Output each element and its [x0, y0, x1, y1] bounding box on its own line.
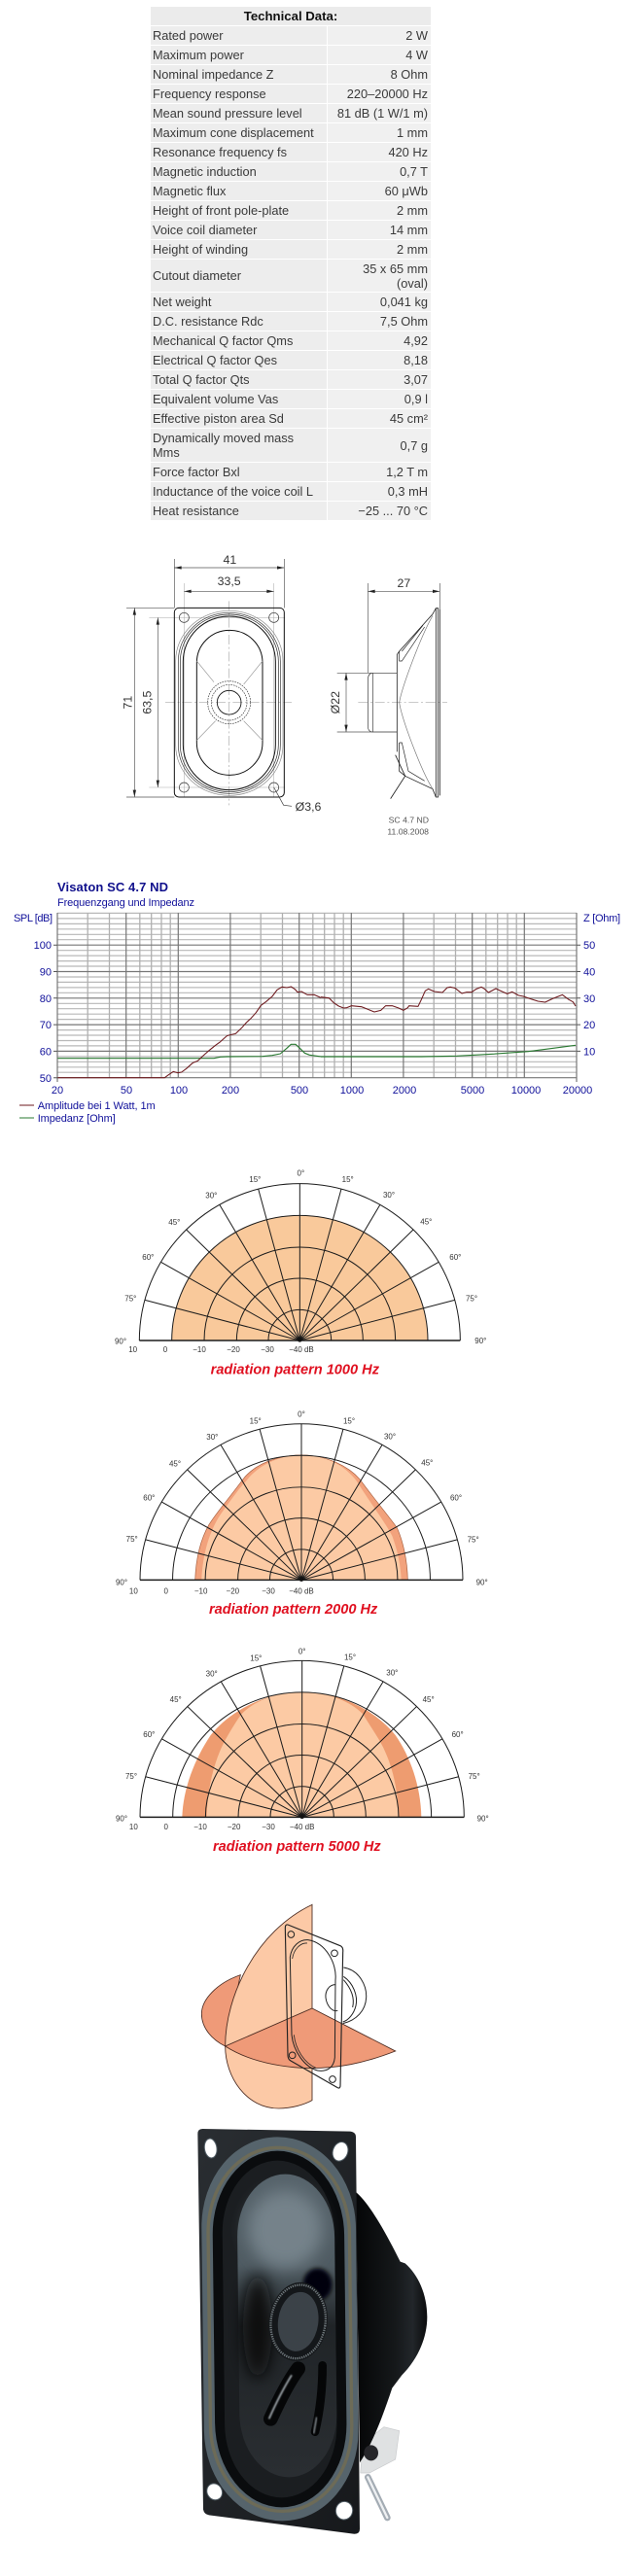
row: dynamically moved mass: 0,7 g — [401, 437, 428, 453]
decibel scale labels — [129, 1823, 314, 1831]
row: DC resistance: D.C. resistance Rdc — [153, 314, 263, 329]
row: mean sound pressure level — [151, 104, 431, 123]
angle labels: 90° — [116, 1815, 127, 1824]
row: nominal impedance: Nominal impedance Z — [153, 67, 273, 82]
row: magnetic flux — [151, 182, 431, 201]
row: dynamically moved mass — [151, 429, 431, 463]
decibel scale labels: −20 — [228, 1823, 241, 1831]
angle labels: 0° — [298, 1168, 304, 1177]
row: voice coil inductance: Inductance of the voice coil L — [153, 484, 313, 499]
row: force factor: Force factor Bxl — [153, 465, 240, 479]
row: mean sound pressure level: Mean sound pressure level — [153, 106, 302, 121]
decibel scale labels: 0 — [163, 1586, 168, 1595]
x axis: frequency: 1000 — [340, 1085, 364, 1097]
row: effective piston area: Effective piston area Sd — [153, 411, 284, 426]
radiation area outer 2000 Hz — [195, 1455, 407, 1580]
angle labels: 60° — [450, 1494, 462, 1503]
technical drawing: speaker dimensions — [121, 553, 447, 837]
dimension labels: side view: Ø22 — [329, 691, 342, 714]
row: voice coil diameter: Voice coil diameter — [153, 223, 257, 237]
photo: speaker product illustration — [197, 2129, 427, 2534]
right axis: impedance: 20 — [583, 1020, 595, 1031]
angle labels: 75° — [125, 1772, 137, 1781]
row: DC resistance: 7,5 Ohm — [380, 314, 428, 329]
row: cutout diameter: (oval) — [397, 276, 428, 290]
decibel scale labels: −10 — [193, 1823, 207, 1831]
lead wire highlight left — [269, 2375, 292, 2419]
right axis: impedance: 10 — [583, 1046, 595, 1058]
row: nominal impedance: 8 Ohm — [391, 67, 428, 82]
angle labels: 60° — [449, 1253, 461, 1262]
x axis: frequency: 50 — [121, 1085, 132, 1097]
angle labels: 15° — [250, 1416, 262, 1425]
decibel scale labels: −10 — [194, 1586, 208, 1595]
row: total Q factor — [151, 370, 431, 390]
angle labels: 75° — [469, 1772, 480, 1781]
row: voice coil diameter: 14 mm — [390, 223, 428, 237]
angle labels: 15° — [249, 1175, 261, 1184]
panel: technical data table — [151, 7, 431, 520]
row: rated power — [151, 26, 431, 46]
decibel scale labels: −40 dB — [289, 1345, 314, 1354]
polar grid — [140, 1660, 464, 1819]
dimension lines: front view — [126, 559, 292, 806]
angle labels: 15° — [250, 1654, 262, 1662]
row: voice coil inductance — [151, 482, 431, 502]
dust cap — [263, 2279, 333, 2365]
x axis: frequency: 10000 — [511, 1085, 541, 1097]
row: electrical Q factor: 8,18 — [404, 353, 428, 367]
row: force factor — [151, 463, 431, 482]
chart title: Visaton SC 4.7 ND — [57, 880, 168, 894]
polar grid — [140, 1424, 463, 1582]
row: mechanical Q factor: 4,92 — [404, 333, 428, 348]
angle labels: 75° — [468, 1536, 479, 1545]
polar plot: radiation pattern 5000 Hz — [116, 1648, 489, 1855]
angle labels: 15° — [343, 1416, 355, 1425]
chart grid — [53, 913, 580, 1082]
row: maximum power — [151, 46, 431, 65]
angle labels: 0° — [298, 1410, 305, 1419]
decibel scale labels: −30 — [262, 1586, 275, 1595]
row: frequency response — [151, 85, 431, 104]
row: resonance frequency — [151, 143, 431, 162]
angle labels: 45° — [170, 1695, 182, 1704]
row: electrical Q factor: Electrical Q factor Qes — [153, 353, 277, 367]
angle labels: 30° — [383, 1191, 395, 1200]
row: height of front pole-plate — [151, 201, 431, 221]
dimension labels: side view — [329, 576, 429, 837]
left axis: SPL: 80 — [40, 993, 52, 1005]
surround lighter band — [222, 2161, 337, 2497]
row: total Q factor: Total Q factor Qts — [153, 372, 250, 387]
decibel scale labels: −30 — [261, 1345, 274, 1354]
legend: Amplitude bei 1 Watt, 1m — [38, 1100, 156, 1112]
row: equivalent volume: 0,9 l — [404, 392, 428, 406]
x axis: frequency: 5000 — [461, 1085, 484, 1097]
row: height of winding: 2 mm — [397, 242, 428, 257]
x axis: frequency: 2000 — [393, 1085, 416, 1097]
horizontal plane front — [226, 2008, 396, 2069]
row: heat resistance — [151, 502, 431, 521]
row: voice coil inductance: 0,3 mH — [388, 484, 428, 499]
row: magnetic induction: 0,7 T — [400, 164, 428, 179]
solder lug — [368, 2477, 387, 2518]
row: maximum cone displacement: 1 mm — [397, 125, 428, 140]
lead wire highlight right — [314, 2418, 317, 2433]
angle labels: 90° — [477, 1815, 489, 1824]
caption: radiation pattern 2000 Hz — [209, 1602, 378, 1618]
angle labels: 60° — [452, 1730, 464, 1739]
gasket ring — [200, 2137, 360, 2521]
front flange — [197, 2129, 360, 2534]
legend — [19, 1100, 156, 1125]
x axis: frequency: 100 — [170, 1085, 188, 1097]
cone highlight — [248, 2190, 323, 2268]
decibel scale labels: −20 — [227, 1586, 240, 1595]
radiation area inner 2000 Hz — [201, 1455, 402, 1580]
front view of speaker — [149, 583, 292, 805]
polar grid — [139, 1184, 460, 1342]
left axis: SPL: SPL [dB] — [14, 913, 53, 924]
angle labels: 75° — [466, 1294, 477, 1303]
row: equivalent volume — [151, 390, 431, 409]
lead wire glue right — [315, 2365, 323, 2432]
radiation area inner 5000 Hz — [207, 1692, 399, 1817]
row: maximum cone displacement — [151, 123, 431, 143]
angle labels: 90° — [115, 1338, 126, 1346]
caption: radiation pattern 5000 Hz — [213, 1839, 381, 1855]
right axis: impedance: 50 — [583, 940, 595, 952]
dimension labels: front view: 63,5 — [140, 691, 154, 714]
dimension labels: side view: SC 4.7 ND — [389, 816, 429, 825]
vertical plane — [226, 1904, 312, 2108]
decibel scale labels — [129, 1586, 314, 1595]
row: force factor: 1,2 T m — [386, 465, 428, 479]
row: net weight: 0,041 kg — [380, 295, 428, 309]
angle labels — [116, 1648, 489, 1824]
solder terminal tab — [361, 2427, 400, 2473]
mounting holes — [203, 2138, 354, 2521]
row: equivalent volume: Equivalent volume Vas — [153, 392, 278, 406]
lug highlight — [368, 2477, 387, 2518]
right axis: impedance: 30 — [583, 993, 595, 1005]
angle labels — [115, 1168, 486, 1346]
decibel scale labels: −40 dB — [289, 1586, 314, 1595]
row: resonance frequency: 420 Hz — [388, 145, 428, 159]
angle labels: 30° — [206, 1433, 218, 1442]
x axis: frequency — [52, 1085, 592, 1097]
angle labels: 75° — [126, 1535, 138, 1544]
right axis: impedance: 40 — [583, 966, 595, 978]
dimension labels: side view: 27 — [397, 576, 410, 590]
table heading: Technical Data: — [244, 9, 337, 23]
row: height of front pole-plate: Height of front pole-plate — [153, 203, 289, 218]
angle labels: 45° — [421, 1459, 433, 1468]
row: heat resistance: Heat resistance — [153, 504, 239, 518]
decibel scale labels: −20 — [227, 1345, 240, 1354]
left axis: SPL: 90 — [40, 966, 52, 978]
basket and magnet — [356, 2192, 427, 2462]
row: net weight: Net weight — [153, 295, 211, 309]
row: frequency response: 220–20000 Hz — [347, 87, 428, 101]
angle labels: 90° — [474, 1337, 486, 1345]
row: rated power: 2 W — [405, 28, 428, 43]
legend: Impedanz [Ohm] — [38, 1113, 116, 1125]
right axis: impedance: Z [Ohm] — [583, 913, 620, 924]
row: heat resistance: −25 ... 70 °C — [358, 504, 428, 518]
decibel scale labels — [128, 1345, 314, 1354]
dimension labels: front view — [121, 553, 322, 814]
x axis: frequency: 20000 — [563, 1085, 592, 1097]
row: height of front pole-plate: 2 mm — [397, 203, 428, 218]
speaker magnet behind — [326, 1967, 367, 2024]
row: frequency response: Frequency response — [153, 87, 266, 101]
angle labels: 90° — [116, 1578, 127, 1586]
left axis: SPL — [14, 913, 53, 1085]
row: maximum power: 4 W — [405, 48, 428, 62]
row: maximum cone displacement: Maximum cone displacement — [153, 125, 314, 140]
row: dynamically moved mass: Dynamically moved mass — [153, 431, 294, 445]
row: dynamically moved mass: Mms — [153, 445, 180, 460]
decibel scale labels: 10 — [128, 1345, 138, 1354]
row: height of winding: Height of winding — [153, 242, 248, 257]
radiation area 1000 Hz — [172, 1215, 428, 1340]
row: voice coil diameter — [151, 221, 431, 240]
cone — [236, 2175, 337, 2477]
terminal rivet — [364, 2445, 378, 2460]
angle labels: 30° — [205, 1192, 217, 1201]
row: effective piston area — [151, 409, 431, 429]
row: magnetic induction: Magnetic induction — [153, 164, 257, 179]
decibel scale labels: 0 — [163, 1345, 168, 1354]
row: mechanical Q factor — [151, 331, 431, 351]
dimension labels: front view: 41 — [223, 553, 236, 567]
row: nominal impedance — [151, 65, 431, 85]
x axis: frequency: 500 — [291, 1085, 308, 1097]
angle labels: 75° — [124, 1294, 136, 1303]
row: cutout diameter: Cutout diameter — [153, 268, 241, 283]
polar plot: radiation pattern 2000 Hz — [116, 1410, 488, 1618]
left axis: SPL: 70 — [40, 1020, 52, 1031]
dust cap shadow — [303, 2268, 333, 2301]
decibel scale labels: −30 — [262, 1823, 275, 1831]
illustration: 3D radiation planes around speaker — [201, 1904, 396, 2108]
angle labels: 60° — [143, 1494, 155, 1503]
row: cutout diameter — [151, 260, 431, 293]
angle labels: 45° — [423, 1695, 435, 1704]
row: net weight — [151, 293, 431, 312]
angle labels — [116, 1410, 488, 1586]
row: cutout diameter: 35 x 65 mm — [363, 261, 428, 276]
angle labels: 15° — [344, 1654, 356, 1662]
angle labels: 60° — [142, 1253, 154, 1262]
dimension labels: side view: 11.08.2008 — [387, 827, 429, 837]
dimension labels: front view: 71 — [121, 696, 134, 710]
left axis: SPL: 100 — [34, 940, 52, 952]
angle labels: 30° — [386, 1668, 398, 1677]
radiation area outer 5000 Hz — [182, 1692, 421, 1817]
decibel scale labels: 10 — [129, 1586, 138, 1595]
decibel scale labels: −40 dB — [290, 1823, 314, 1831]
row: effective piston area: 45 cm² — [390, 411, 428, 426]
impedance curve — [57, 1044, 576, 1059]
row: maximum power: Maximum power — [153, 48, 244, 62]
row: resonance frequency: Resonance frequency fs — [153, 145, 287, 159]
row: DC resistance — [151, 312, 431, 331]
row: total Q factor: 3,07 — [404, 372, 428, 387]
chart: frequency response and impedance — [14, 880, 620, 1125]
cone shadow — [243, 2275, 272, 2379]
row: mean sound pressure level: 81 dB (1 W/1 m) — [337, 106, 428, 121]
decibel scale labels: 0 — [163, 1823, 168, 1831]
row: magnetic induction — [151, 162, 431, 182]
horizontal plane rear — [201, 1975, 240, 2046]
amplitude curve — [57, 987, 576, 1078]
row: magnetic flux: Magnetic flux — [153, 184, 226, 198]
surround and cone assembly — [200, 2137, 360, 2521]
chart subtitle: Frequenzgang und Impedanz — [57, 897, 194, 909]
row: magnetic flux: 60 μWb — [385, 184, 428, 198]
gasket highlight — [207, 2147, 353, 2511]
polar plot: radiation pattern 1000 Hz — [115, 1168, 486, 1377]
left axis: SPL: 60 — [40, 1046, 52, 1058]
speaker outline — [285, 1925, 343, 2088]
row: height of winding — [151, 240, 431, 260]
angle labels: 45° — [168, 1218, 180, 1227]
row: electrical Q factor — [151, 351, 431, 370]
side view of speaker — [358, 609, 447, 799]
inner dark surround — [212, 2151, 347, 2507]
x axis: frequency: 20 — [52, 1085, 63, 1097]
caption: radiation pattern 1000 Hz — [211, 1362, 380, 1377]
angle labels: 45° — [420, 1217, 432, 1226]
x axis: frequency: 200 — [222, 1085, 239, 1097]
angle labels: 0° — [298, 1648, 305, 1656]
angle labels: 30° — [384, 1432, 396, 1441]
angle labels: 45° — [169, 1459, 181, 1468]
angle labels: 15° — [342, 1175, 354, 1184]
decibel scale labels: 10 — [129, 1823, 138, 1831]
angle labels: 30° — [206, 1669, 218, 1678]
right axis: impedance — [583, 913, 620, 1058]
row: mechanical Q factor: Mechanical Q factor Qms — [153, 333, 293, 348]
table heading — [151, 7, 431, 26]
decibel scale labels: −10 — [193, 1345, 206, 1354]
left axis: SPL: 50 — [40, 1073, 52, 1085]
angle labels: 60° — [143, 1730, 155, 1739]
row: rated power: Rated power — [153, 28, 224, 43]
dimension labels: front view: Ø3,6 — [296, 800, 322, 814]
angle labels: 90° — [476, 1578, 488, 1586]
dimension labels: front view: 33,5 — [218, 574, 241, 588]
dimension lines: side view — [337, 583, 439, 732]
lead wire glue left — [270, 2369, 298, 2419]
